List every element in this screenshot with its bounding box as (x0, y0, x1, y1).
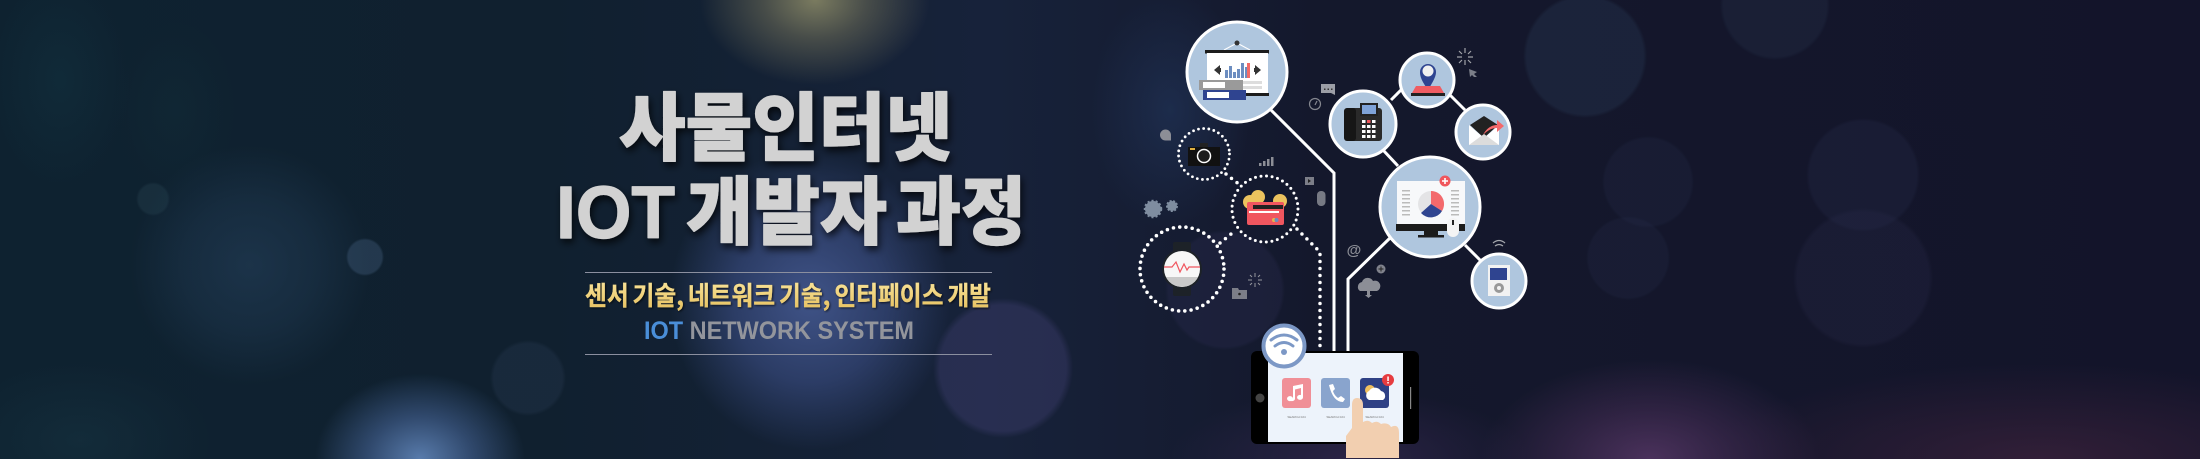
icon: chat bubble (1321, 84, 1335, 95)
icon: gears (1145, 201, 1177, 217)
circle: office phone (1330, 91, 1396, 157)
circle: music player (1472, 254, 1526, 308)
icon: loader top (1457, 48, 1473, 65)
app labels: SEARCH 024 (1326, 415, 1345, 419)
subtitle: English: IOT NETWORK SYSTEM (644, 317, 914, 345)
app icon: weather (1360, 374, 1394, 408)
app icon: phone (1321, 378, 1350, 408)
icon: plus circle (1376, 264, 1386, 274)
tablet (1251, 351, 1419, 444)
app labels: SEARCH 024 (1365, 415, 1384, 419)
hand pointer (1346, 398, 1399, 458)
app labels: SEARCH 024 (1287, 415, 1306, 419)
circle: map pin (1400, 53, 1454, 107)
circle: camera (1178, 128, 1230, 180)
icon: wifi small (1493, 240, 1505, 246)
circle: smart watch (1140, 227, 1224, 311)
icon: at sign: @ (1347, 242, 1361, 259)
app labels (1287, 415, 1384, 419)
icon: cursor (1469, 69, 1477, 77)
circle: monitor (1380, 157, 1480, 257)
icon: play folder (1305, 177, 1314, 185)
app icon: music (1282, 378, 1311, 408)
subtitle: Korean: 센서 기술, 네트워크 기술, 인터페이스 개발 (585, 276, 991, 313)
icon: clock (1310, 98, 1320, 110)
dotted connectors (1220, 174, 1320, 350)
circle: mail (1456, 105, 1510, 159)
divider bottom (585, 354, 992, 355)
icon: loader bottom (1248, 273, 1262, 287)
title: 사물인터넷 (619, 87, 952, 170)
icon: round chat (1160, 130, 1171, 140)
icon: mouse (1317, 191, 1326, 206)
circle: presentation board (1187, 22, 1287, 122)
title: IOT (556, 171, 675, 254)
divider top (585, 272, 992, 273)
icon: lock folder (1232, 288, 1247, 299)
wifi badge (1264, 326, 1304, 366)
icon: cloud download (1358, 278, 1380, 298)
connector lines (1271, 88, 1481, 352)
title (556, 87, 1026, 254)
circle: credit card (1232, 176, 1298, 242)
title: 개발자 (686, 171, 887, 254)
icon: signal bars (1259, 157, 1274, 166)
title: 과정 (896, 171, 1026, 254)
